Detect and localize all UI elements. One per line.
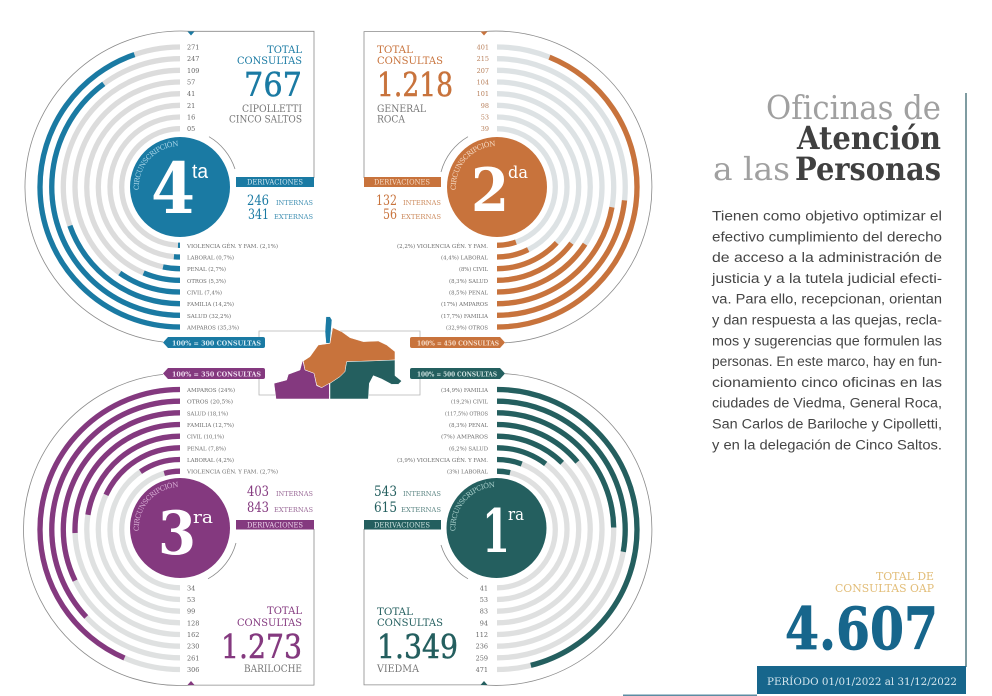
small arc 3ra	[208, 543, 236, 579]
total consultas 2da: TOTAL	[377, 44, 413, 56]
derivaciones 1ra: INTERNAS	[403, 490, 441, 498]
category labels 2da: (17,7%) FAMILIA	[441, 313, 488, 320]
derivaciones 2da	[364, 177, 441, 223]
category labels 2da: (8,5%) PENAL	[449, 290, 488, 296]
consultation counts 4ta	[187, 44, 199, 133]
right column: description: y en la delegación de Cinco Saltos.	[712, 437, 942, 452]
consultation counts 2da	[477, 44, 489, 133]
right column: description: Tienen como objetivo optimizar el	[712, 208, 942, 224]
category labels 4ta: OTROS (5,3%)	[187, 278, 226, 285]
consultation counts 4ta: 41	[187, 90, 195, 98]
consultation counts 1ra: 112	[476, 631, 488, 639]
category labels 1ra: (7%) AMPAROS	[441, 434, 488, 441]
derivaciones 2da: DERIVACIONES	[374, 178, 430, 186]
derivaciones 3ra: DERIVACIONES	[247, 521, 303, 529]
badge 4ta	[130, 137, 230, 237]
badge 3ra: 3	[158, 499, 196, 569]
total consultas 4ta: 767	[244, 65, 302, 104]
consultation counts 1ra: 471	[476, 666, 488, 674]
category labels 1ra: (117,5%) OTROS	[445, 410, 488, 417]
derivaciones 4ta: 341	[248, 207, 269, 223]
consultation counts 1ra: 53	[480, 596, 488, 604]
category labels 4ta: FAMILIA (14,2%)	[187, 301, 234, 308]
consultation counts 3ra: 261	[187, 654, 199, 662]
badge 4ta: 4	[151, 147, 195, 230]
total consultas 2da: 1.218	[377, 65, 453, 104]
badge 2da	[447, 137, 547, 237]
category labels 2da: (8%) CIVIL	[459, 266, 488, 273]
panel: 3ra circunscripción	[23, 368, 314, 686]
consultation counts 2da: 104	[477, 78, 489, 86]
category labels 4ta: AMPAROS (35,3%)	[186, 324, 239, 332]
consultation counts 4ta: 21	[187, 102, 195, 110]
category labels 3ra: FAMILIA (12,7%)	[187, 422, 234, 429]
consultation counts 2da: 101	[477, 90, 489, 98]
rings: data arcs 4ta	[40, 47, 180, 327]
consultation counts 3ra: 53	[187, 596, 195, 604]
small arc 2da	[441, 137, 468, 172]
category labels 3ra: LABORAL (4,2%)	[187, 457, 234, 464]
small arc 4ta	[209, 137, 235, 169]
category labels 3ra: AMPAROS (24%)	[186, 387, 235, 394]
derivaciones 4ta	[236, 177, 314, 223]
total consultas 4ta: CINCO SALTOS	[229, 114, 302, 126]
derivaciones 1ra: EXTERNAS	[401, 506, 441, 514]
right column: description: personas. En este marco, hay en fun-	[712, 354, 942, 369]
right column: description: justicia y a la tutela judicial efecti-	[711, 271, 942, 286]
right column: title: Atención	[796, 119, 941, 157]
frame outline 2da	[364, 31, 652, 343]
badge 4ta: CIRCUNSCRIPCIÓN	[134, 140, 178, 190]
right column: description: San Carlos de Bariloche y Cipolletti,	[712, 416, 942, 432]
badge 1ra	[446, 478, 546, 578]
derivaciones 4ta: 246	[247, 193, 269, 209]
badge 1ra: CIRCUNSCRIPCIÓN	[450, 482, 494, 531]
frame outline 4ta	[25, 31, 314, 342]
scale pill 3ra: 100% = 350 CONSULTAS	[172, 370, 261, 378]
consultation counts 2da: 39	[481, 125, 489, 133]
marker triangle 2da	[480, 32, 488, 36]
right column: title: Personas	[795, 150, 941, 188]
consultation counts 3ra: 306	[187, 666, 199, 674]
category labels 2da: (32,9%) OTROS	[446, 324, 488, 332]
panel: 4ta circunscripción	[24, 30, 314, 348]
consultation counts 1ra	[476, 584, 488, 674]
consultation counts 2da: 215	[477, 55, 489, 63]
frame outline 1ra	[364, 374, 652, 685]
rings: gray tracks 2da	[497, 47, 637, 327]
right column: vertical rule	[965, 93, 967, 667]
total consultas 3ra: CONSULTAS	[237, 617, 302, 629]
derivaciones 4ta: DERIVACIONES	[247, 178, 303, 186]
category labels 1ra: (8,3%) PENAL	[449, 422, 488, 429]
category labels 3ra: PENAL (7,8%)	[187, 445, 226, 452]
derivaciones 4ta: EXTERNAS	[274, 213, 313, 221]
consultation counts 1ra: 83	[480, 608, 488, 616]
total consultas 1ra: CONSULTAS	[377, 617, 443, 629]
total consultas 1ra: VIEDMA	[376, 663, 419, 675]
total consultas 2da: CONSULTAS	[377, 55, 443, 67]
scale pill 2da: 100% = 450 CONSULTAS	[417, 339, 499, 347]
derivaciones 3ra: EXTERNAS	[274, 506, 313, 514]
rings: data arcs 1ra	[497, 390, 637, 670]
category labels 1ra: (34,9%) FAMILIA	[441, 387, 488, 394]
period bar	[757, 666, 966, 694]
category labels 2da: (2,2%) VIOLENCIA GÉN. Y FAM.	[397, 242, 488, 250]
right column: description	[711, 208, 942, 452]
badge 2da: CIRCUNSCRIPCIÓN	[450, 140, 495, 190]
derivaciones 2da: 132	[376, 193, 397, 209]
total consultas 2da: GENERAL	[377, 103, 426, 115]
derivaciones 3ra	[236, 484, 314, 530]
total consultas 4ta: CONSULTAS	[237, 55, 302, 67]
consultation counts 3ra	[187, 584, 199, 674]
category labels 1ra: (3%) LABORAL	[447, 469, 488, 476]
consultation counts 1ra: 236	[476, 643, 488, 651]
derivaciones 4ta: INTERNAS	[276, 199, 313, 207]
right column: description: efectivo cumplimiento del derecho	[712, 229, 942, 244]
bottom rule	[623, 694, 757, 696]
category labels 3ra: VIOLENCIA GÉN. Y FAM. (2,7%)	[186, 468, 278, 476]
frame outline 3ra	[24, 374, 314, 686]
rings: data arcs 2da	[497, 47, 637, 327]
total consultas 3ra: 1.273	[221, 627, 302, 666]
scale pill 3ra	[163, 368, 265, 379]
total consultas 4ta: CIPOLLETTI	[242, 103, 302, 115]
scale pill 2da	[410, 337, 505, 348]
consultation counts 4ta: 57	[187, 78, 195, 86]
small arc 1ra	[441, 545, 468, 579]
grand total: CONSULTAS OAP	[835, 582, 935, 595]
category labels 3ra: OTROS (20,5%)	[187, 399, 233, 406]
right column: description: cionamiento cinco oficinas en las	[712, 375, 942, 390]
badge 4ta: ta	[192, 161, 209, 183]
grand total: TOTAL DE	[876, 570, 934, 583]
marker triangle 1ra	[480, 681, 488, 685]
right column: title: a las	[713, 150, 790, 188]
total consultas 1ra: 1.349	[377, 627, 458, 666]
rings: data arcs 3ra	[40, 390, 180, 670]
rings: gray tracks 4ta	[40, 47, 180, 327]
right column: description: va. Para ello, recepcionan, orientan	[712, 292, 942, 307]
category labels 3ra: CIVIL (10,1%)	[187, 434, 224, 441]
consultation counts 3ra: 162	[187, 631, 199, 639]
derivaciones 1ra: 615	[374, 500, 397, 516]
period bar: PERÍODO 01/01/2022 al 31/12/2022	[767, 674, 957, 688]
derivaciones 3ra: INTERNAS	[276, 490, 313, 498]
consultation counts 4ta: 247	[187, 55, 199, 63]
consultation counts 4ta: 16	[187, 114, 195, 122]
category labels 4ta: CIVIL (7,4%)	[187, 290, 222, 296]
derivaciones 2da: INTERNAS	[403, 199, 441, 207]
badge 1ra: ra	[508, 505, 524, 525]
total consultas 3ra	[221, 605, 302, 675]
consultation counts 2da: 401	[477, 44, 489, 52]
derivaciones 3ra: 843	[247, 500, 269, 516]
badge 3ra: ra	[193, 508, 213, 528]
category labels 3ra: SALUD (18,1%)	[187, 410, 228, 417]
total consultas 3ra: BARILOCHE	[244, 663, 302, 675]
category labels 4ta: LABORAL (0,7%)	[187, 254, 234, 262]
category labels 4ta: PENAL (2,7%)	[187, 266, 226, 273]
consultation counts 1ra: 94	[480, 619, 488, 627]
right column: description: mos y sugerencias que formulen las	[712, 333, 942, 348]
total consultas 2da: ROCA	[377, 114, 405, 126]
consultation counts 4ta: 05	[187, 125, 195, 133]
category labels 2da: (17%) AMPAROS	[441, 301, 488, 308]
badge 1ra: 1	[482, 497, 510, 567]
total consultas 4ta: TOTAL	[267, 44, 302, 56]
right column: title: Oficinas de	[766, 88, 941, 127]
category labels 1ra: (3,9%) VIOLENCIA GÉN. Y FAM.	[397, 456, 488, 464]
category labels 1ra: (19,2%) CIVIL	[451, 399, 488, 406]
consultation counts 3ra: 230	[187, 643, 199, 651]
consultation counts 2da: 207	[477, 67, 489, 75]
rings: gray tracks 1ra	[497, 390, 637, 670]
grand total: 4.607	[785, 595, 938, 663]
marker triangle 3ra	[188, 681, 194, 685]
category labels 2da: (4,4%) LABORAL	[441, 254, 488, 262]
total consultas 4ta	[229, 44, 302, 126]
badge 2da: 2	[471, 156, 509, 226]
total consultas 1ra: TOTAL	[377, 606, 413, 618]
category labels 2da: (8,3%) SALUD	[449, 278, 489, 285]
derivaciones 1ra: 543	[374, 484, 397, 500]
scale pill 1ra	[410, 368, 505, 379]
consultation counts 1ra: 41	[480, 584, 488, 592]
category labels 4ta: VIOLENCIA GÉN. Y FAM. (2,1%)	[186, 242, 278, 250]
consultation counts 4ta: 271	[187, 44, 199, 52]
badge 2da: da	[508, 163, 528, 183]
derivaciones 1ra	[364, 484, 441, 530]
derivaciones 2da: EXTERNAS	[401, 213, 441, 221]
consultation counts 3ra: 128	[187, 619, 199, 627]
consultation counts 1ra: 259	[476, 654, 488, 662]
derivaciones 3ra: 403	[247, 484, 269, 500]
marker triangle 4ta	[188, 32, 194, 36]
total consultas 2da	[377, 44, 453, 126]
consultation counts 3ra: 34	[187, 584, 195, 592]
category labels 3ra	[186, 387, 278, 476]
consultation counts 2da: 98	[481, 102, 489, 110]
derivaciones 2da: 56	[383, 207, 397, 223]
rings: gray tracks 3ra	[40, 390, 180, 670]
right column: description: ciudades de Viedma, General Roca,	[712, 396, 942, 411]
panel: 2da circunscripción	[364, 30, 652, 348]
category labels 1ra: (6,2%) SALUD	[449, 445, 489, 452]
scale pill 1ra: 100% = 500 CONSULTAS	[417, 370, 497, 378]
total consultas 1ra	[376, 606, 458, 675]
consultation counts 4ta: 109	[187, 67, 199, 75]
category labels 1ra	[397, 387, 489, 476]
scale pill 4ta: 100% = 300 CONSULTAS	[172, 339, 261, 347]
consultation counts 3ra: 99	[187, 608, 195, 616]
right column: description: de acceso a la administración de	[712, 250, 942, 265]
badge 3ra: CIRCUNSCRIPCIÓN	[134, 482, 178, 531]
map of Río Negro with leader frame	[259, 317, 420, 399]
scale pill 4ta	[163, 337, 265, 348]
badge 3ra	[130, 478, 230, 578]
panel: 1ra circunscripción	[364, 368, 652, 686]
total consultas 3ra: TOTAL	[267, 605, 302, 617]
category labels 2da	[397, 242, 489, 332]
consultation counts 2da: 53	[481, 114, 489, 122]
derivaciones 1ra: DERIVACIONES	[374, 521, 430, 529]
category labels 4ta	[186, 242, 278, 332]
grand total	[785, 570, 938, 663]
category labels 4ta: SALUD (32,2%)	[187, 313, 231, 320]
right column: description: y dan respuesta a las quejas, recla-	[712, 312, 942, 328]
right column: title	[713, 88, 941, 188]
